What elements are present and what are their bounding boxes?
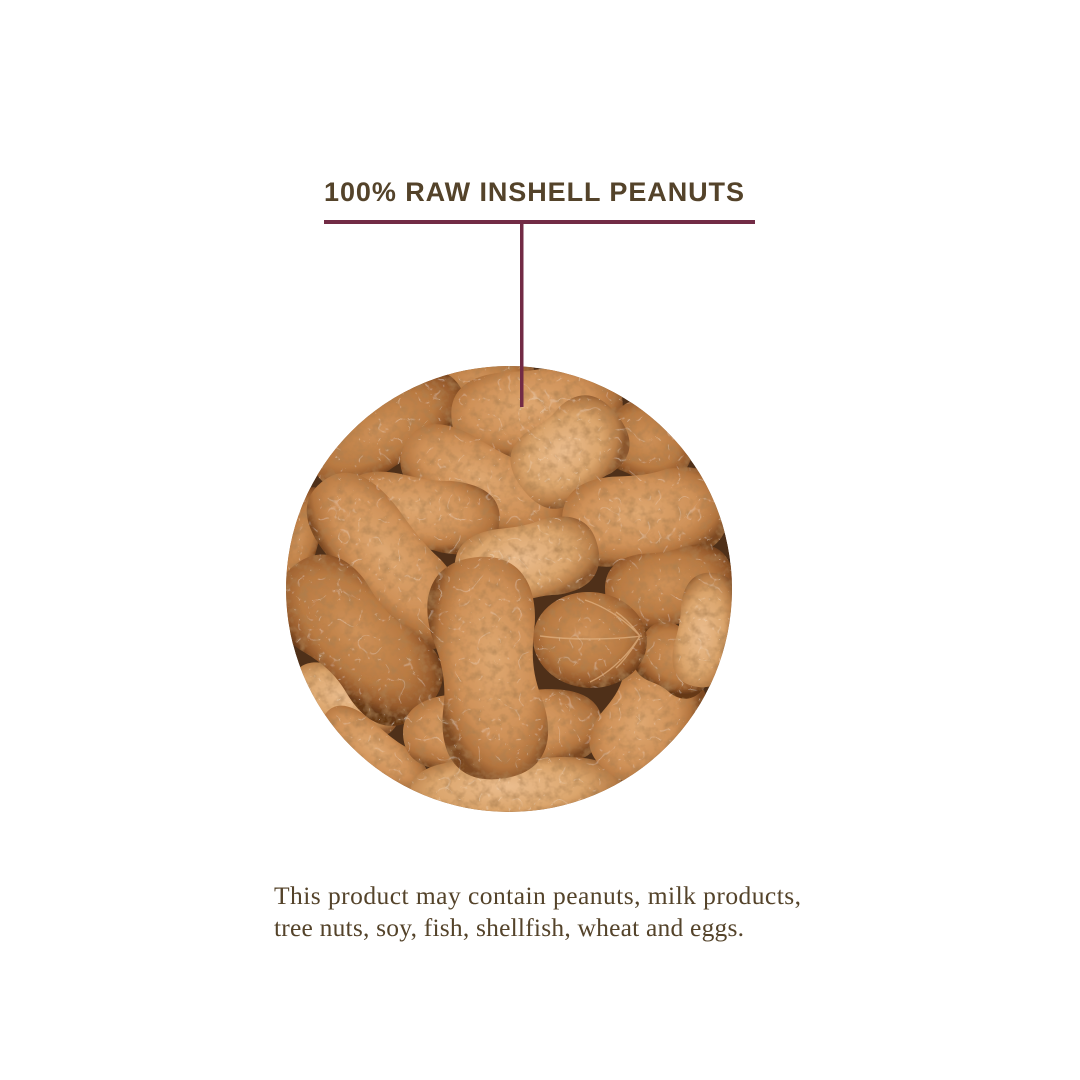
- peanuts: [286, 366, 732, 812]
- allergen note: [274, 881, 801, 942]
- title: 100% RAW INSHELL PEANUTS: [324, 177, 744, 207]
- circular peanut illustration: [286, 366, 732, 812]
- allergen note: tree nuts, soy, fish, shellfish, wheat and eggs.: [274, 913, 744, 942]
- allergen note: This product may contain peanuts, milk products,: [274, 881, 801, 910]
- ridges on the round peanut: [540, 600, 642, 682]
- horizontal rule: [324, 220, 755, 224]
- vertical connector line: [520, 222, 524, 407]
